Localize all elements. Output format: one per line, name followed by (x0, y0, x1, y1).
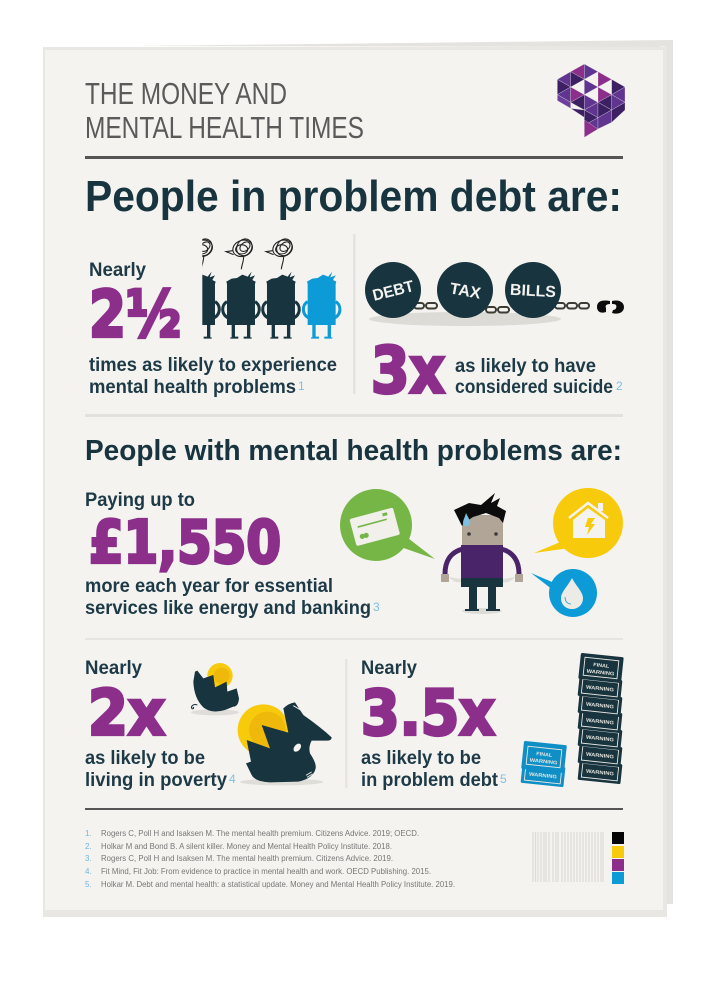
masthead title: MENTAL HEALTH TIMES (85, 110, 364, 145)
big number 2½: 2½ (89, 278, 181, 352)
panel: 2x poverty stat (85, 658, 236, 791)
warning 6: WARNING (586, 752, 614, 760)
ball: tax: TAX (448, 281, 482, 303)
torso (461, 545, 503, 578)
description: as likely to have (455, 356, 596, 377)
description line two: mental health problems (89, 377, 296, 398)
footnote marker 4: 4 (229, 772, 236, 786)
warning 2: WARNING (586, 685, 614, 693)
head (462, 515, 503, 545)
person two (223, 236, 259, 339)
description line two: in problem debt (361, 770, 499, 791)
label nearly: Nearly (361, 658, 417, 679)
legs (465, 585, 500, 611)
chain (414, 303, 589, 312)
final warning (521, 741, 567, 773)
masthead title: THE MONEY AND (85, 76, 287, 111)
sweat drop (463, 513, 470, 526)
footnote 5: 5. (85, 880, 92, 889)
section rule (85, 414, 623, 417)
warning 5: WARNING (586, 735, 614, 743)
panel: 3x suicide stat (371, 334, 623, 408)
icon: large broken piggy bank (238, 702, 332, 785)
second heading: People with mental health problems are: (85, 435, 622, 467)
lead in: Paying up to (85, 490, 195, 511)
big number 3.5x: 3.5x (361, 676, 495, 750)
label nearly: Nearly (89, 260, 146, 281)
ball: bills (505, 262, 561, 318)
footnote 2: Holkar M and Bond B. A silent killer. Money and Mental Health Policy Institute. 2018. (101, 842, 392, 851)
pockets (449, 577, 515, 582)
section rule (85, 638, 623, 640)
final warning (578, 653, 624, 683)
description line two: considered suicide (455, 377, 613, 398)
footnotes (85, 829, 455, 889)
warning 7: WARNING (586, 769, 614, 777)
footnote 1: 1. (85, 829, 92, 838)
description: times as likely to experience (89, 355, 337, 376)
panel: 2½ times stat (89, 260, 337, 398)
footer rule (85, 808, 623, 810)
colour swatches (612, 832, 624, 884)
column divider (345, 659, 348, 788)
ball: debt: DEBT (371, 278, 416, 305)
ball: bills: BILLS (510, 282, 557, 301)
hands (441, 574, 523, 582)
big number 3x: 3x (371, 334, 445, 408)
final warning: WARNING (529, 758, 558, 766)
icon: row of people, three in four dark (202, 238, 342, 339)
big number 2x: 2x (88, 676, 165, 750)
icon: tall stack of warning letters (578, 653, 624, 784)
big number £1,550: £1,550 (89, 508, 281, 576)
icon: bank card speech bubble (340, 489, 435, 561)
warning: WARNING (529, 772, 557, 780)
footnote 2: 2. (85, 842, 92, 851)
description line two: services like energy and banking (85, 598, 371, 619)
warning 4: WARNING (586, 718, 614, 726)
arms (445, 549, 519, 574)
person one cropped (202, 238, 221, 339)
icon: small broken piggy bank (191, 663, 239, 715)
description: as likely to be (85, 748, 205, 769)
icon: debt, tax and bills balls and chain (365, 262, 624, 326)
person three (263, 236, 299, 339)
description: more each year for essential (85, 576, 333, 597)
footnote marker 1: 1 (298, 379, 305, 393)
shackle (597, 300, 624, 314)
footnote 4: 4. (85, 867, 92, 876)
paper background stack (43, 40, 673, 917)
ball: tax (437, 262, 493, 318)
footnote marker 5: 5 (500, 772, 507, 786)
final warning: WARNING (586, 669, 615, 677)
panel: 3.5x problem debt stat (361, 658, 507, 791)
hair (454, 493, 506, 526)
person four blue (303, 272, 340, 339)
ball: debt (365, 262, 421, 318)
footnote 3: 3. (85, 854, 92, 863)
footnote 5: Holkar M. Debt and mental health: a statistical update. Money and Mental Health Policy Institute. 2019. (101, 880, 455, 889)
footnote marker 3: 3 (373, 600, 380, 614)
masthead title (85, 76, 364, 145)
logo (557, 64, 625, 137)
footnote 4: Fit Mind, Fit Job: From evidence to practice in mental health and work. OECD Publishing. 2015. (101, 867, 431, 876)
footnote marker 2: 2 (616, 379, 623, 393)
column divider (353, 234, 356, 394)
shadow (369, 312, 561, 326)
icon: house energy speech bubble (534, 488, 623, 558)
main heading: People in problem debt are: (85, 172, 622, 221)
description line two: living in poverty (85, 770, 227, 791)
description: as likely to be (361, 748, 481, 769)
final warning: FINAL (593, 662, 609, 670)
top rule (85, 156, 623, 159)
panel: £1,550 stat (85, 490, 380, 619)
barcode (533, 832, 603, 882)
icon: small stack of blue warning letters (521, 741, 567, 787)
shadow (462, 608, 502, 614)
icon: water drop speech bubble (531, 569, 597, 617)
footnote 3: Rogers C, Poll H and Isaksen M. The mental health premium. Citizens Advice. 2019. (101, 854, 393, 863)
eyes (467, 532, 471, 536)
warning 3: WARNING (586, 702, 614, 710)
final warning: FINAL (536, 751, 552, 759)
footnote 1: Rogers C, Poll H and Isaksen M. The mental health premium. Citizens Advice. 2019; OECD. (101, 829, 419, 838)
label nearly: Nearly (85, 658, 142, 679)
trousers (461, 576, 503, 587)
icon: worried man with empty pockets (441, 493, 523, 614)
